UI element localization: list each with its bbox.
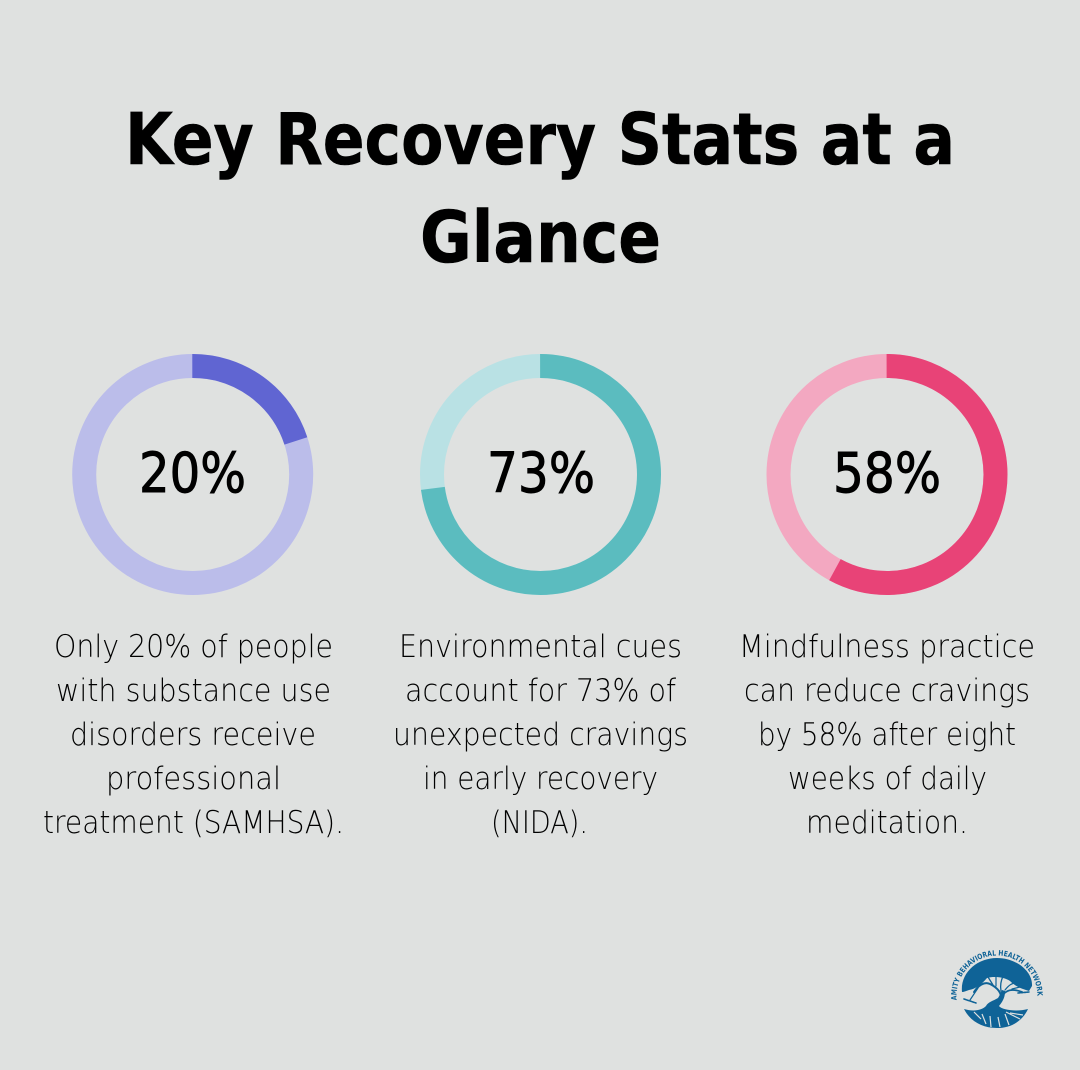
icon: tree canopy [962, 958, 1032, 992]
donut chart: 73% [432, 366, 649, 583]
description: 20%: professional [106, 761, 281, 797]
donut chart: 20% [84, 366, 301, 583]
title: Key Recovery Stats at a [125, 98, 955, 181]
icon: tree trunk and branches [964, 976, 1029, 1003]
title [125, 98, 955, 279]
description: 20% [43, 629, 344, 841]
panel: 58% stat [739, 366, 1035, 841]
description: 58%: Mindfulness practice [739, 629, 1035, 665]
description: 20%: treatment (SAMHSA). [43, 805, 344, 841]
value: 58%: 58% [833, 441, 941, 505]
icon: tree roots [964, 990, 1028, 1028]
description: 73%: account for 73% of [405, 673, 676, 709]
description: 58%: weeks of daily [788, 761, 987, 797]
description: 58%: meditation. [806, 805, 968, 841]
icon: root gaps [974, 1012, 1023, 1027]
title: Glance [420, 196, 661, 279]
logo: Amity Behavioral Health Network [951, 950, 1043, 1028]
description: 73%: in early recovery [423, 761, 658, 797]
description: 20%: disorders receive [70, 717, 316, 753]
description: 58% [739, 629, 1035, 841]
description: 58%: can reduce cravings [744, 673, 1030, 709]
description: 73%: (NIDA). [491, 805, 588, 841]
description: 73%: unexpected cravings [393, 717, 688, 753]
panel: 73% stat [393, 366, 688, 841]
description: 20%: with substance use [56, 673, 331, 709]
value: 20%: 20% [139, 441, 246, 505]
logo text: AMITY BEHAVIORAL HEALTH NETWORK [951, 950, 1043, 1000]
description: 20%: Only 20% of people [54, 629, 333, 665]
donut chart: 58% [778, 366, 996, 583]
value: 73%: 73% [487, 441, 595, 505]
panel: 20% stat [43, 366, 344, 841]
description: 73% [393, 629, 688, 841]
description: 58%: by 58% after eight [758, 717, 1016, 753]
description: 73%: Environmental cues [399, 629, 682, 665]
